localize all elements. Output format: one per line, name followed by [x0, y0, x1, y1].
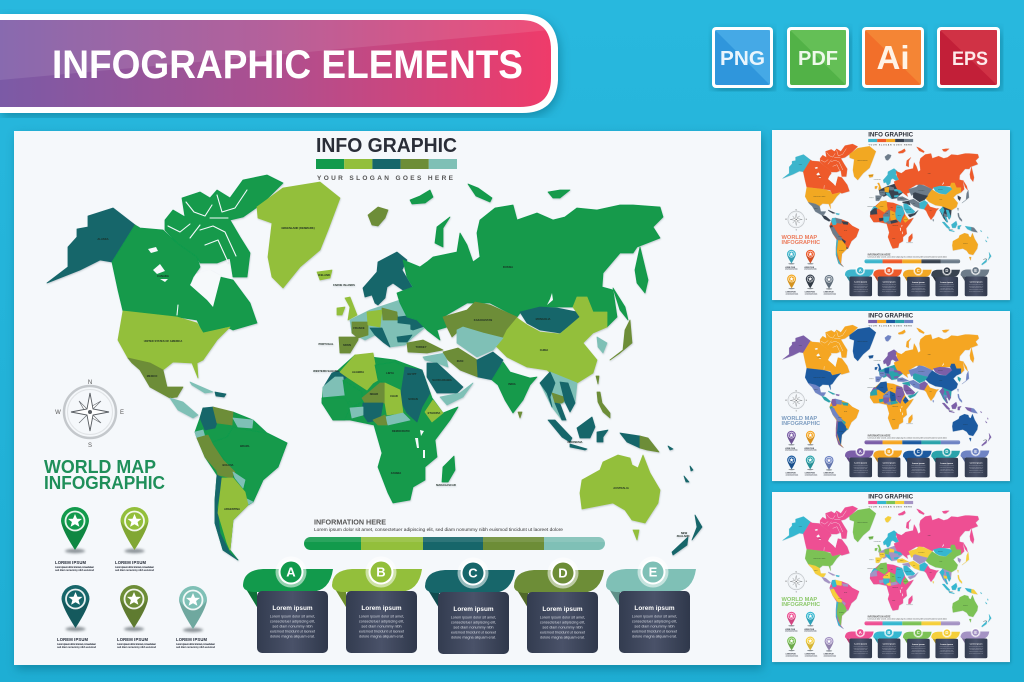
- icon: EPS format: EPS: [952, 49, 988, 70]
- panel: blue colour variant thumbnail: [772, 311, 1010, 481]
- map pin 4: [117, 585, 156, 649]
- card D: D: [558, 566, 568, 581]
- country labels: IRAN: [457, 359, 463, 363]
- country labels: ICELAND: [318, 273, 330, 277]
- card D: consectetuer adipiscing elit,: [540, 620, 585, 624]
- Europe: [337, 190, 433, 353]
- icon: Ai format: Ai: [876, 39, 910, 76]
- country labels: LIBYA: [386, 371, 394, 375]
- information text: INFORMATION HERE: [314, 518, 386, 526]
- card A: euismod tincidunt ut laoreet: [270, 630, 315, 634]
- icon: PNG format: PNG: [720, 48, 765, 70]
- panel: pink colour variant thumbnail: [772, 492, 1010, 662]
- heading: info graphic: INFO GRAPHIC: [316, 135, 457, 157]
- card E: euismod tincidunt ut laoreet: [632, 630, 677, 634]
- country labels: BRAZIL: [240, 444, 250, 448]
- icon: PDF format: [787, 27, 849, 88]
- map pin 4: Lorem ipsum dolor sit amet, consectetuer: [117, 643, 156, 646]
- Asia: [397, 184, 693, 482]
- card B: euismod tincidunt ut laoreet: [359, 630, 404, 634]
- information text: [314, 518, 564, 532]
- map pin 4: sed diam nonummy nibh euismod: [117, 646, 156, 649]
- map pin 3: [57, 585, 96, 649]
- card D: dolore magna aliquam erat.: [540, 636, 585, 640]
- map pin 3: LOREM IPSUM: [57, 637, 88, 642]
- card A: consectetuer adipiscing elit,: [270, 620, 315, 624]
- country labels: ARGENTINA: [224, 507, 240, 511]
- card A: dolore magna aliquam erat.: [270, 634, 315, 638]
- card D: [514, 558, 604, 653]
- title banner: [0, 14, 558, 113]
- country labels: SUDAN: [408, 397, 418, 401]
- country labels: CHINA: [540, 348, 548, 352]
- map pin 4: LOREM IPSUM: [117, 637, 148, 642]
- country labels: SPAIN: [343, 343, 351, 347]
- map pin 2: sed diam nonummy nibh euismod: [115, 569, 154, 572]
- icon: PNG format: [712, 27, 773, 88]
- country labels: CHAD: [390, 394, 398, 398]
- country labels: TURKEY: [415, 345, 427, 349]
- country labels: NEW: [681, 531, 688, 535]
- country labels: INDONESIA: [568, 440, 583, 444]
- card E: Lorem ipsum: [634, 605, 675, 612]
- card A: Lorem ipsum dolor sit amet,: [270, 614, 315, 618]
- country labels: UNITED STATES OF AMERICA: [144, 339, 182, 343]
- icon: EPS format: [937, 27, 1000, 88]
- compass: W: [55, 410, 61, 416]
- icon: Ai format: [862, 27, 924, 88]
- card B: [332, 556, 422, 653]
- panel: main green world map infographic: [14, 131, 761, 665]
- card C: dolore magna aliquam erat.: [451, 636, 496, 640]
- card A: sed diam nonummy nibh: [272, 624, 313, 628]
- panel: orange colour variant thumbnail: [772, 130, 1010, 300]
- compass: N: [88, 380, 92, 386]
- North America: [47, 175, 340, 418]
- map pin 1: [55, 507, 94, 572]
- country labels: MONGOLIA: [536, 317, 550, 321]
- country labels: ETHIOPIA: [428, 411, 440, 415]
- map pin 1: LOREM IPSUM: [55, 560, 86, 565]
- country labels: ALGERIA: [352, 370, 364, 374]
- card D: sed diam nonummy nibh: [542, 626, 583, 630]
- card B: Lorem ipsum: [361, 605, 402, 612]
- map pin 2: [115, 507, 154, 572]
- map pin 3: Lorem ipsum dolor sit amet, consectetuer: [57, 643, 96, 646]
- card E: E: [649, 565, 658, 580]
- heading: world map infographic: [44, 457, 165, 493]
- card A: A: [286, 565, 296, 580]
- card C: [425, 558, 515, 654]
- country labels: AUSTRALIA: [613, 486, 629, 490]
- world map: [47, 175, 702, 560]
- country labels: BOLIVIA: [223, 463, 234, 467]
- country labels: FRANCE: [353, 326, 365, 330]
- card E: [606, 556, 696, 653]
- map pin 1: Lorem ipsum dolor sit amet, consectetuer: [55, 566, 94, 569]
- map pin 5: sed diam nonummy nibh euismod: [176, 646, 215, 649]
- icon: PDF format: PDF: [798, 48, 838, 70]
- title colour strip: [316, 159, 457, 169]
- card E: dolore magna aliquam erat.: [632, 634, 677, 638]
- map pin 2: Lorem ipsum dolor sit amet, consectetuer: [115, 566, 154, 569]
- country labels: DEMOCRATIC: [392, 429, 410, 433]
- slogan: YOUR SLOGAN GOES HERE: [317, 175, 454, 182]
- card A: Lorem ipsum: [272, 605, 313, 612]
- country labels: ALASKA: [97, 237, 109, 241]
- card B: dolore magna aliquam erat.: [359, 634, 404, 638]
- country labels: SAUDI ARABIA: [432, 378, 452, 382]
- card A: [243, 556, 333, 653]
- card B: B: [376, 565, 386, 580]
- country labels: PORTUGAL: [318, 342, 334, 346]
- card B: Lorem ipsum dolor sit amet,: [359, 614, 404, 618]
- map pin 5: [176, 586, 215, 649]
- compass: S: [88, 443, 92, 449]
- country labels: ZAMBIA: [391, 471, 401, 475]
- map pin 1: sed diam nonummy nibh euismod: [55, 569, 94, 572]
- information bar: [304, 537, 605, 550]
- country labels: FAROE ISLANDS: [333, 283, 355, 287]
- map pin 5: LOREM IPSUM: [176, 637, 208, 642]
- card C: C: [468, 566, 478, 581]
- Africa: [322, 353, 458, 503]
- card E: sed diam nonummy nibh: [634, 624, 675, 628]
- card C: euismod tincidunt ut laoreet: [451, 630, 496, 634]
- card B: sed diam nonummy nibh: [361, 624, 402, 628]
- South America: [195, 407, 287, 560]
- country labels: CANADA: [157, 274, 169, 278]
- country labels: [97, 226, 689, 538]
- country labels: GREENLAND (DENMARK): [281, 226, 315, 230]
- map pin 5: Lorem ipsum dolor sit amet, consectetuer: [176, 643, 215, 646]
- card C: sed diam nonummy nibh: [453, 626, 494, 630]
- card D: euismod tincidunt ut laoreet: [540, 630, 585, 634]
- country labels: NIGER: [370, 392, 378, 396]
- country labels: RUSSIA: [503, 265, 513, 269]
- compass: [55, 380, 124, 449]
- country labels: MEXICO: [147, 374, 157, 378]
- information text: Lorem ipsum dolor sit amet, consectetuer adipiscing elit, sed diam nonummy nibh euismod tincidunt ut laoreet dolore: [314, 527, 564, 532]
- heading: world map infographic: INFOGRAPHIC: [44, 473, 165, 493]
- country labels: ZEALAND: [677, 534, 689, 538]
- country labels: EGYPT: [407, 372, 417, 376]
- card E: consectetuer adipiscing elit,: [632, 620, 677, 624]
- map pin 2: LOREM IPSUM: [115, 560, 146, 565]
- country labels: MADAGASCAR: [436, 483, 456, 487]
- card C: Lorem ipsum: [453, 606, 494, 613]
- Oceania: [580, 455, 702, 555]
- card B: consectetuer adipiscing elit,: [359, 620, 404, 624]
- card E: Lorem ipsum dolor sit amet,: [632, 614, 677, 618]
- card C: Lorem ipsum dolor sit amet,: [451, 616, 496, 620]
- country labels: KAZAKHSTAN: [474, 318, 492, 322]
- map pin 3: sed diam nonummy nibh euismod: [57, 646, 96, 649]
- compass: E: [120, 410, 124, 416]
- country labels: WESTERN SAHARA: [313, 369, 339, 373]
- card D: Lorem ipsum dolor sit amet,: [540, 616, 585, 620]
- card D: Lorem ipsum: [542, 606, 583, 613]
- country labels: INDIA: [508, 382, 516, 386]
- card C: consectetuer adipiscing elit,: [451, 620, 496, 624]
- heading: world map infographic: WORLD MAP: [44, 457, 156, 477]
- title banner: INFOGRAPHIC ELEMENTS: [52, 43, 523, 87]
